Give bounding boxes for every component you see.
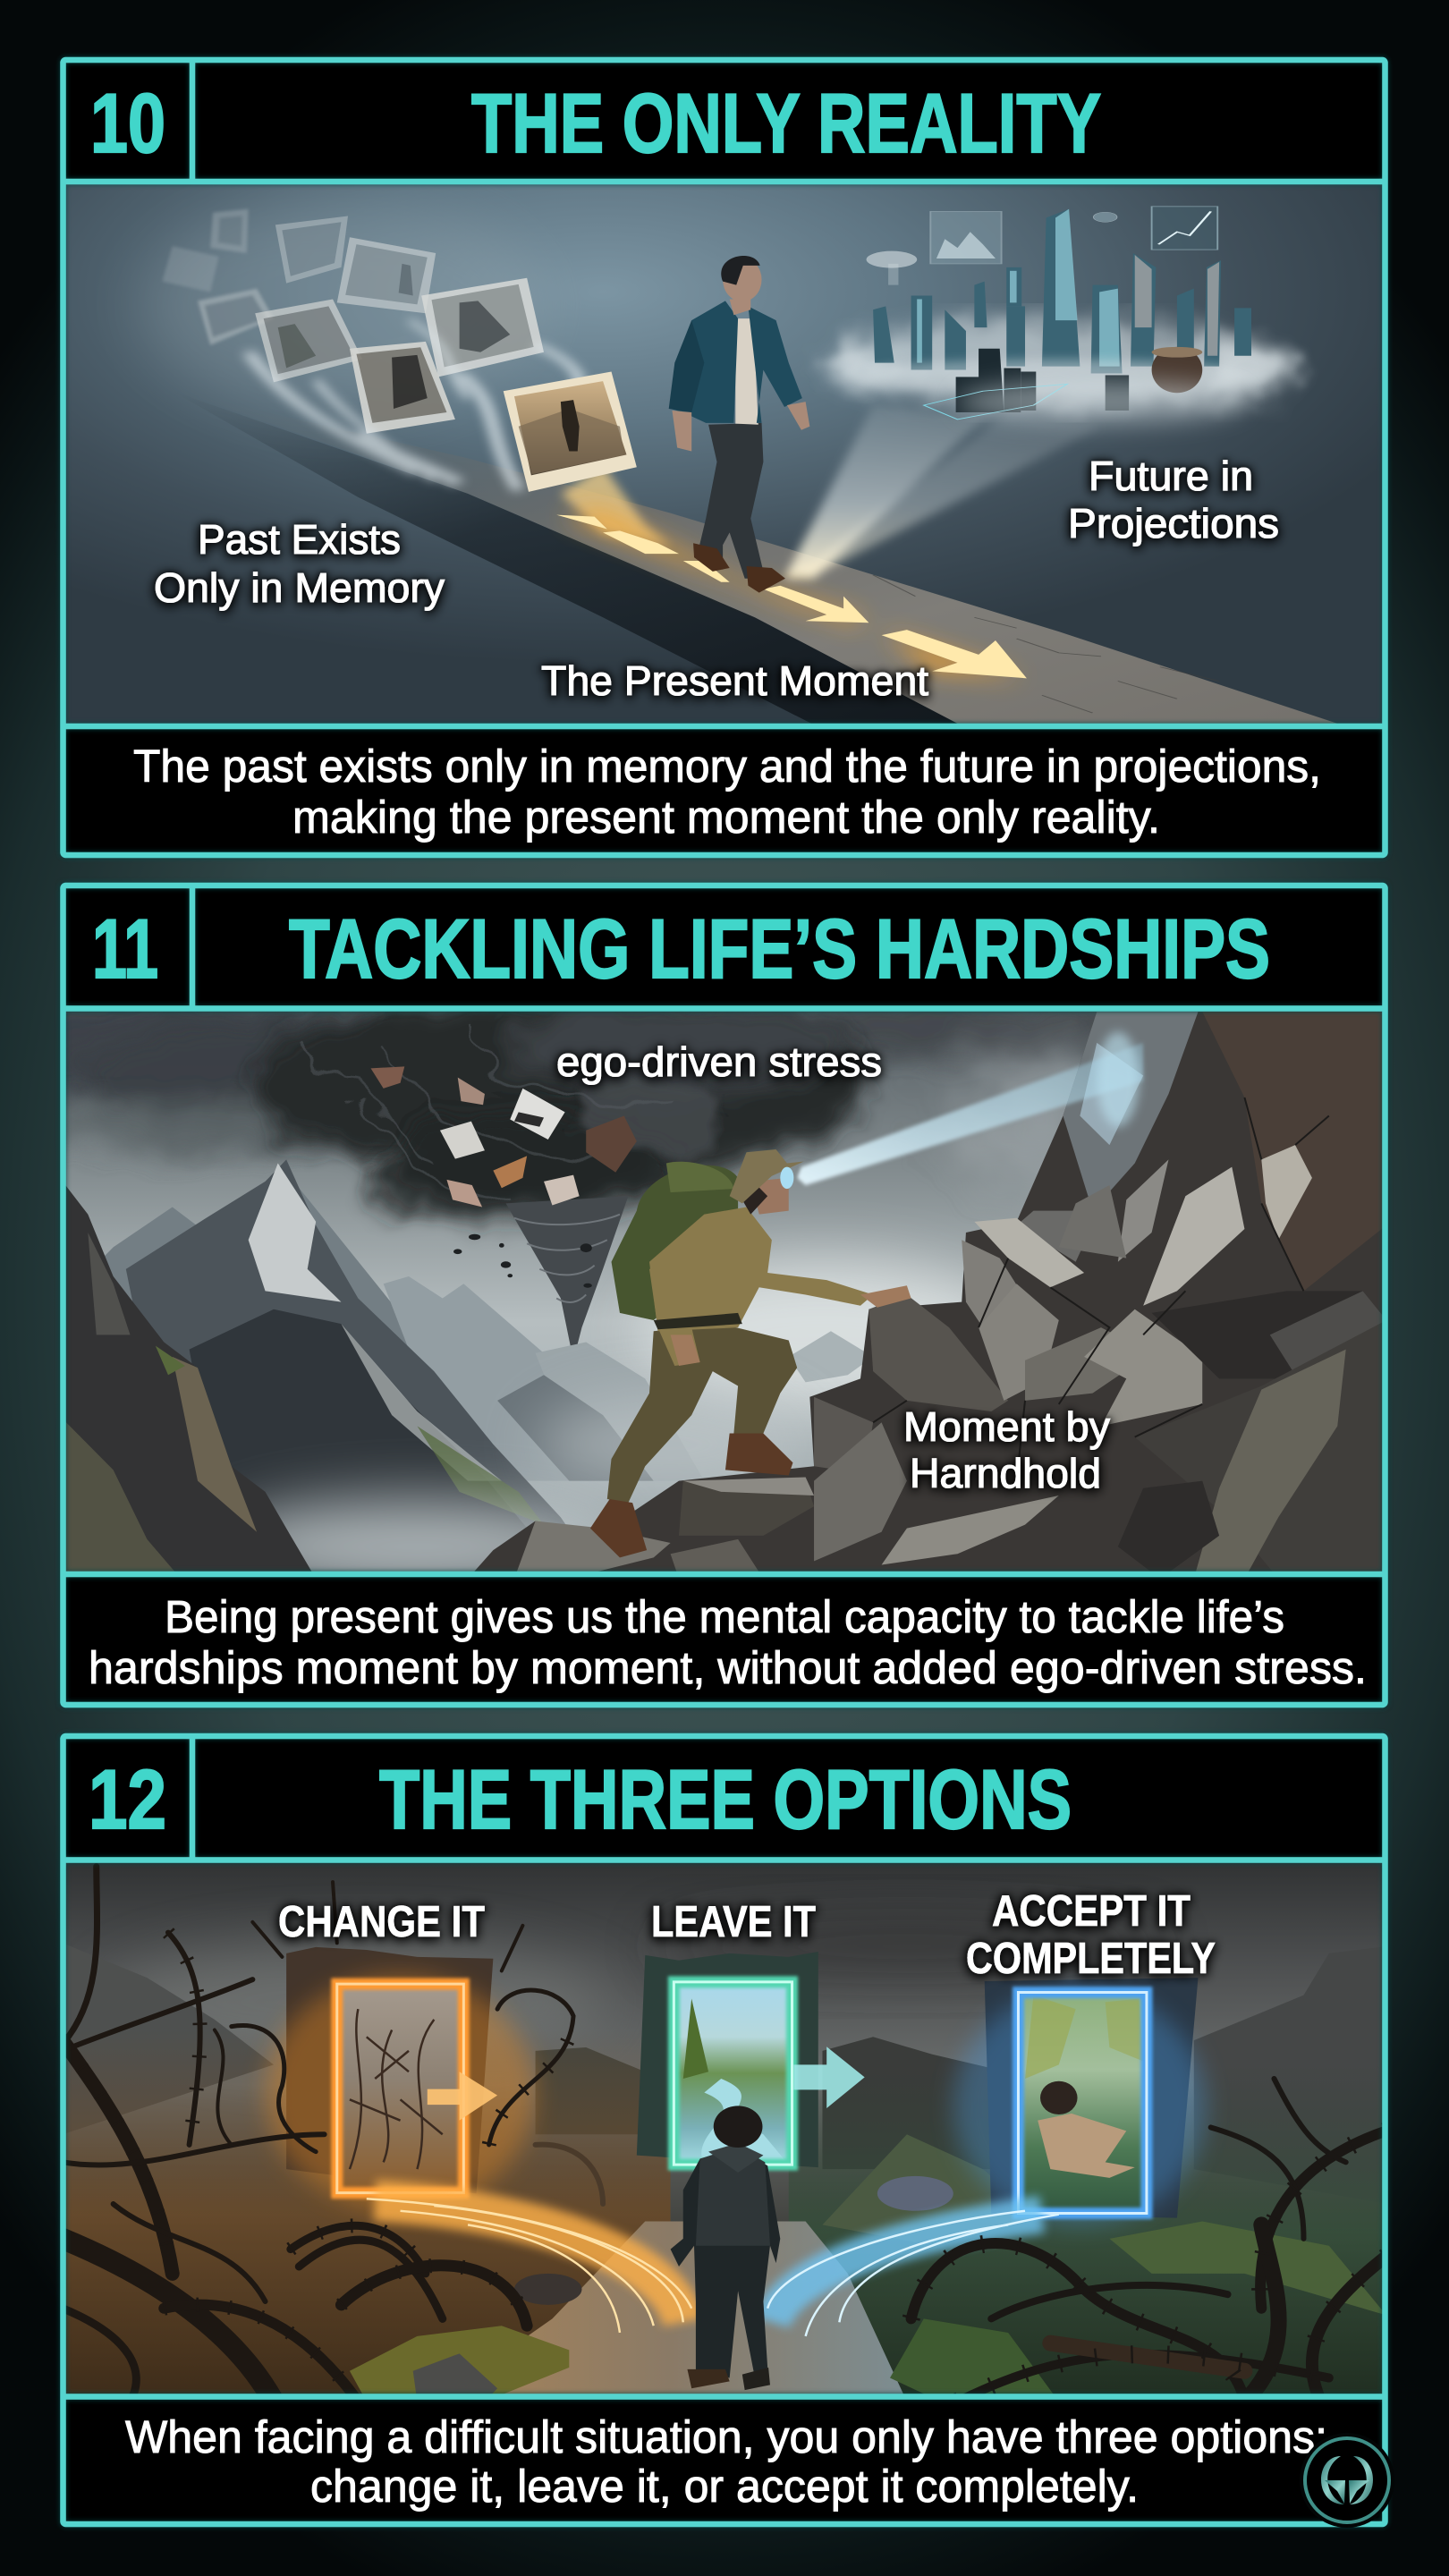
- image labels: Past Exists: [198, 516, 401, 563]
- illustration: man walking along the present-moment ledge: [66, 184, 1383, 724]
- future projection rays: [784, 405, 1101, 579]
- door labels: CHANGE IT: [278, 1898, 485, 1946]
- door labels: ACCEPT IT: [992, 1887, 1191, 1936]
- title: the three options: THE THREE OPTIONS: [379, 1752, 1072, 1846]
- caption: When facing a difficult situation, you only have three options:: [125, 2411, 1327, 2462]
- panel 11: tackling life's hardships: [0, 886, 1386, 1705]
- section number 12: 12: [89, 1752, 166, 1846]
- header bar: [63, 1736, 1385, 1860]
- image labels: The Present Moment: [541, 657, 928, 704]
- logo badge: [1300, 2433, 1394, 2528]
- glowing arrows on the ledge: [556, 512, 1027, 678]
- right rock face: [468, 1012, 1386, 1579]
- latest sepia photograph: [504, 371, 671, 547]
- arrow pointing out of door 2: [793, 2046, 865, 2108]
- image labels: Future in: [1089, 453, 1253, 499]
- distant mountains: [63, 1159, 873, 1579]
- floating future city: [831, 207, 1287, 423]
- header bar: [63, 886, 1385, 1008]
- thorn spikes left: [63, 1933, 573, 2402]
- caption: Being present gives us the mental capacity to tackle life’s: [165, 1591, 1284, 1642]
- stone ledge: [173, 391, 1337, 733]
- caption: The past exists only in memory and the future in projections,: [133, 741, 1321, 792]
- door labels: [278, 1887, 1216, 1983]
- door labels: LEAVE IT: [651, 1898, 816, 1946]
- illustration: hiker climbing beneath a storm: [66, 1011, 1383, 1572]
- header bar: [63, 60, 1385, 182]
- tornado funnel: [453, 1196, 628, 1360]
- frame and dividers: [63, 1736, 1385, 2524]
- illustration: three glowing doorways among thorns: [66, 1863, 1383, 2394]
- caption: [63, 1574, 1385, 1705]
- grass and rocks: [350, 2221, 1386, 2402]
- mountains: [63, 1943, 1386, 2204]
- door 1: change it: [266, 1947, 536, 2211]
- panel 10: the only reality: [63, 60, 1386, 855]
- thorn branches right: [911, 2079, 1386, 2402]
- warm and cool ground tones: [63, 2030, 671, 2402]
- frame and dividers: [63, 60, 1385, 855]
- door 2: leave it: [637, 1952, 865, 2167]
- thorn spikes right: [911, 2131, 1386, 2402]
- door labels: COMPLETELY: [966, 1935, 1216, 1983]
- section number 10: 10: [90, 76, 165, 170]
- glowing light trails: [367, 2199, 1059, 2336]
- caption: change it, leave it, or accept it completely.: [310, 2461, 1139, 2512]
- image labels: [556, 1038, 1110, 1496]
- caption: [63, 726, 1385, 855]
- title: the only reality: THE ONLY REALITY: [471, 76, 1101, 170]
- section number 11: 11: [92, 902, 158, 996]
- valley fog: [215, 1499, 620, 1594]
- man walking: [669, 256, 809, 593]
- thorn branches left: [63, 1867, 603, 2402]
- central path: [434, 2221, 907, 2402]
- door 3: accept it completely: [953, 1978, 1207, 2224]
- faded photographs of the past: [139, 200, 544, 434]
- image labels: Moment by: [903, 1403, 1110, 1450]
- image labels: [154, 453, 1279, 704]
- headlamp light beam: [797, 1043, 1143, 1185]
- storm clouds: [0, 996, 1168, 1222]
- caption: [63, 2396, 1385, 2524]
- image labels: Only in Memory: [154, 564, 445, 611]
- swirling stress debris: [371, 1066, 637, 1207]
- man seen from behind: [671, 2106, 780, 2390]
- image labels: Projections: [1068, 500, 1279, 547]
- panel 12: the three options: [63, 1736, 1386, 2524]
- left cliff: [63, 1182, 316, 1579]
- caption: making the present moment the only reality.: [292, 792, 1160, 843]
- memory smoke trails: [249, 320, 580, 490]
- hiker: [590, 1149, 911, 1557]
- image labels: ego-driven stress: [556, 1038, 882, 1085]
- image labels: Harndhold: [910, 1450, 1101, 1496]
- caption: hardships moment by moment, without added ego-driven stress.: [89, 1642, 1367, 1693]
- frame and dividers: [63, 886, 1385, 1705]
